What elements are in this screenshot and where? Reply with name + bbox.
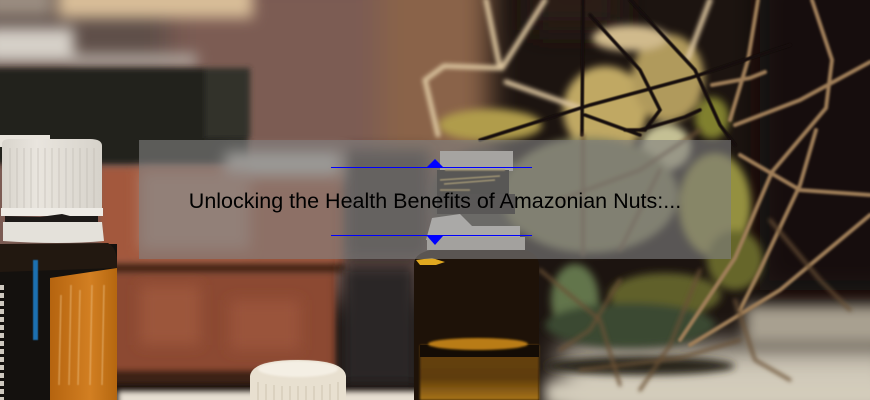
title: Unlocking the Health Benefits of Amazonian Nuts:... — [189, 189, 681, 213]
center amber bottle — [414, 151, 539, 400]
center bottle cap — [426, 151, 525, 250]
top rule with up triangle — [331, 159, 532, 168]
left bottle cap — [1, 139, 104, 243]
table surface — [118, 391, 428, 400]
dark box on books — [0, 68, 250, 164]
dark middle ground — [140, 150, 430, 385]
book texture — [140, 285, 300, 350]
basket interior and fruit — [530, 0, 870, 400]
table behind basket — [545, 305, 870, 400]
translucent title banner — [139, 140, 731, 259]
stack of books — [100, 168, 345, 384]
bottom rule with down triangle — [331, 235, 532, 245]
wire basket strands — [425, 0, 870, 390]
small cream bottle cap at bottom — [250, 360, 346, 400]
left bottle with orange label — [0, 135, 117, 400]
